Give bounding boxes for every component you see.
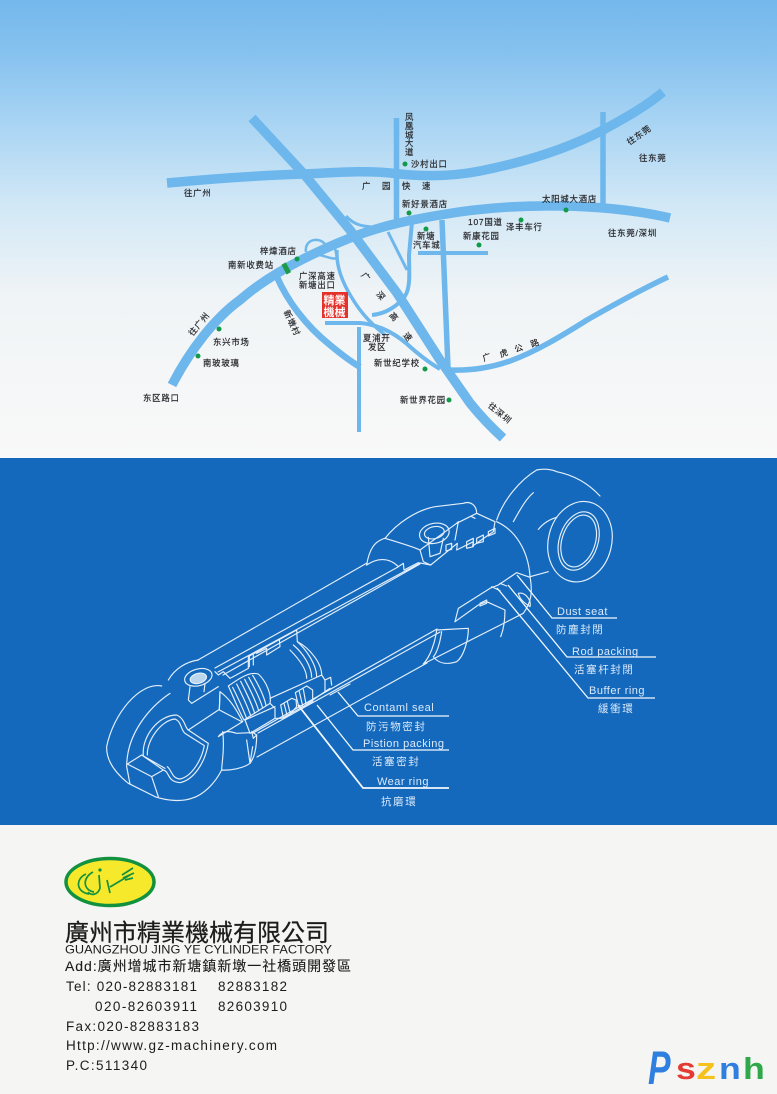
map place labels: 新墩村 — [282, 308, 302, 338]
map place labels: 往东莞 — [639, 153, 667, 163]
company details: P.C:511340 — [66, 1058, 147, 1073]
seal part labels: 活塞杆封閉 — [574, 663, 634, 676]
background: footer — [0, 825, 777, 1094]
map location dots — [196, 162, 568, 402]
map place labels: 发区 — [368, 342, 386, 352]
company details — [65, 920, 351, 1073]
map place labels: 107国道 — [468, 217, 503, 227]
company details: Add:廣州增城市新塘鎮新墩一社橋頭開發區 — [65, 958, 351, 974]
company details: 82883182 — [218, 979, 287, 994]
map place labels: 凰 — [405, 121, 414, 131]
panel: cylinder diagram — [0, 458, 777, 825]
map place labels: 新世界花园 — [400, 395, 446, 405]
leader lines — [298, 575, 656, 788]
seal part labels: Wear ring — [377, 776, 429, 788]
company details: GUANGZHOU JING YE CYLINDER FACTORY — [65, 942, 332, 956]
seal part labels: Dust seat — [557, 606, 608, 618]
map place labels: 东区路口 — [143, 393, 180, 403]
map place labels: 往深圳 — [486, 400, 514, 426]
seal part labels: Buffer ring — [589, 685, 645, 697]
seal part labels — [363, 606, 645, 808]
toll station marker — [281, 262, 291, 274]
seal part labels: Pistion packing — [363, 738, 444, 750]
map place labels: 广 — [362, 181, 371, 191]
map place labels: 新世纪学校 — [374, 358, 420, 368]
watermark: Psznh: h — [743, 1052, 765, 1086]
company details: Http://www.gz-machinery.com — [66, 1038, 277, 1053]
map place labels: 新好景酒店 — [402, 199, 448, 209]
seal part labels: 活塞密封 — [372, 755, 420, 768]
seal part labels: 防塵封閉 — [556, 623, 604, 636]
left clevis and cut-away — [107, 630, 332, 800]
cylinder line drawing — [107, 469, 621, 800]
map place labels: 道 — [405, 147, 414, 157]
map place labels: 凤 — [405, 112, 414, 122]
map place labels: 夏浦开 — [363, 333, 391, 343]
map place labels: 新康花园 — [463, 231, 500, 241]
map place labels: 大 — [405, 138, 414, 148]
right gland and rod eye — [367, 469, 621, 664]
map place labels: 城 — [405, 130, 414, 140]
map place labels: 南玻玻璃 — [203, 358, 240, 368]
seal part labels: Contaml seal — [364, 702, 434, 714]
map place labels: 往广州 — [184, 188, 212, 198]
watermark: Psznh: P — [648, 1042, 671, 1094]
seal part labels: 緩衝環 — [598, 702, 634, 715]
map place labels: 速 — [401, 330, 415, 344]
map place labels: 广深高速 — [299, 271, 336, 281]
map place labels: 泽丰车行 — [506, 222, 543, 232]
map place labels — [143, 112, 667, 426]
map place labels: 虎 — [498, 347, 510, 359]
map place labels: 东兴市场 — [213, 337, 250, 347]
map place labels: 快 — [402, 181, 411, 191]
company location badge: 機械 — [324, 305, 346, 319]
map place labels: 沙村出口 — [411, 159, 448, 169]
map place labels: 南新收费站 — [228, 260, 274, 270]
map place labels: 路 — [529, 337, 541, 349]
map place labels: 广 — [359, 270, 373, 284]
seal part labels: 抗磨環 — [381, 795, 417, 808]
map place labels: 太阳城大酒店 — [542, 194, 597, 204]
watermark: Psznh: z — [696, 1051, 716, 1086]
watermark: Psznh: n — [719, 1052, 741, 1086]
company details: Tel: 020-82883181 — [66, 979, 197, 994]
company location badge: 精業 — [324, 293, 346, 307]
seal part labels: 防污物密封 — [366, 720, 426, 733]
company details: 020-82603911 — [95, 999, 197, 1014]
map place labels: 往东莞 — [625, 123, 653, 147]
map place labels: 园 — [382, 181, 391, 191]
map roads — [167, 92, 670, 438]
company details: Fax:020-82883183 — [66, 1019, 199, 1034]
map place labels: 往东莞/深圳 — [608, 228, 657, 238]
map place labels: 速 — [422, 181, 431, 191]
map place labels: 往广州 — [186, 310, 212, 338]
watermark: Psznh: s — [676, 1052, 696, 1086]
company location badge — [322, 292, 348, 319]
watermark: Psznh — [648, 1042, 765, 1094]
map place labels: 汽车城 — [413, 240, 441, 250]
background: sky gradient — [0, 0, 777, 458]
company details: 82603910 — [218, 999, 287, 1014]
panel: location map — [143, 92, 670, 438]
map place labels: 新塘出口 — [299, 280, 336, 290]
map place labels: 高 — [387, 310, 401, 324]
map place labels: 公 — [513, 342, 525, 354]
company logo — [66, 858, 154, 906]
map place labels: 深 — [374, 289, 388, 303]
map place labels: 梓煒酒店 — [260, 246, 297, 256]
map place labels: 新塘 — [417, 231, 435, 241]
company details: 廣州市精業機械有限公司 — [65, 920, 329, 947]
seal part labels: Rod packing — [572, 646, 639, 658]
map place labels: 广 — [481, 351, 493, 363]
